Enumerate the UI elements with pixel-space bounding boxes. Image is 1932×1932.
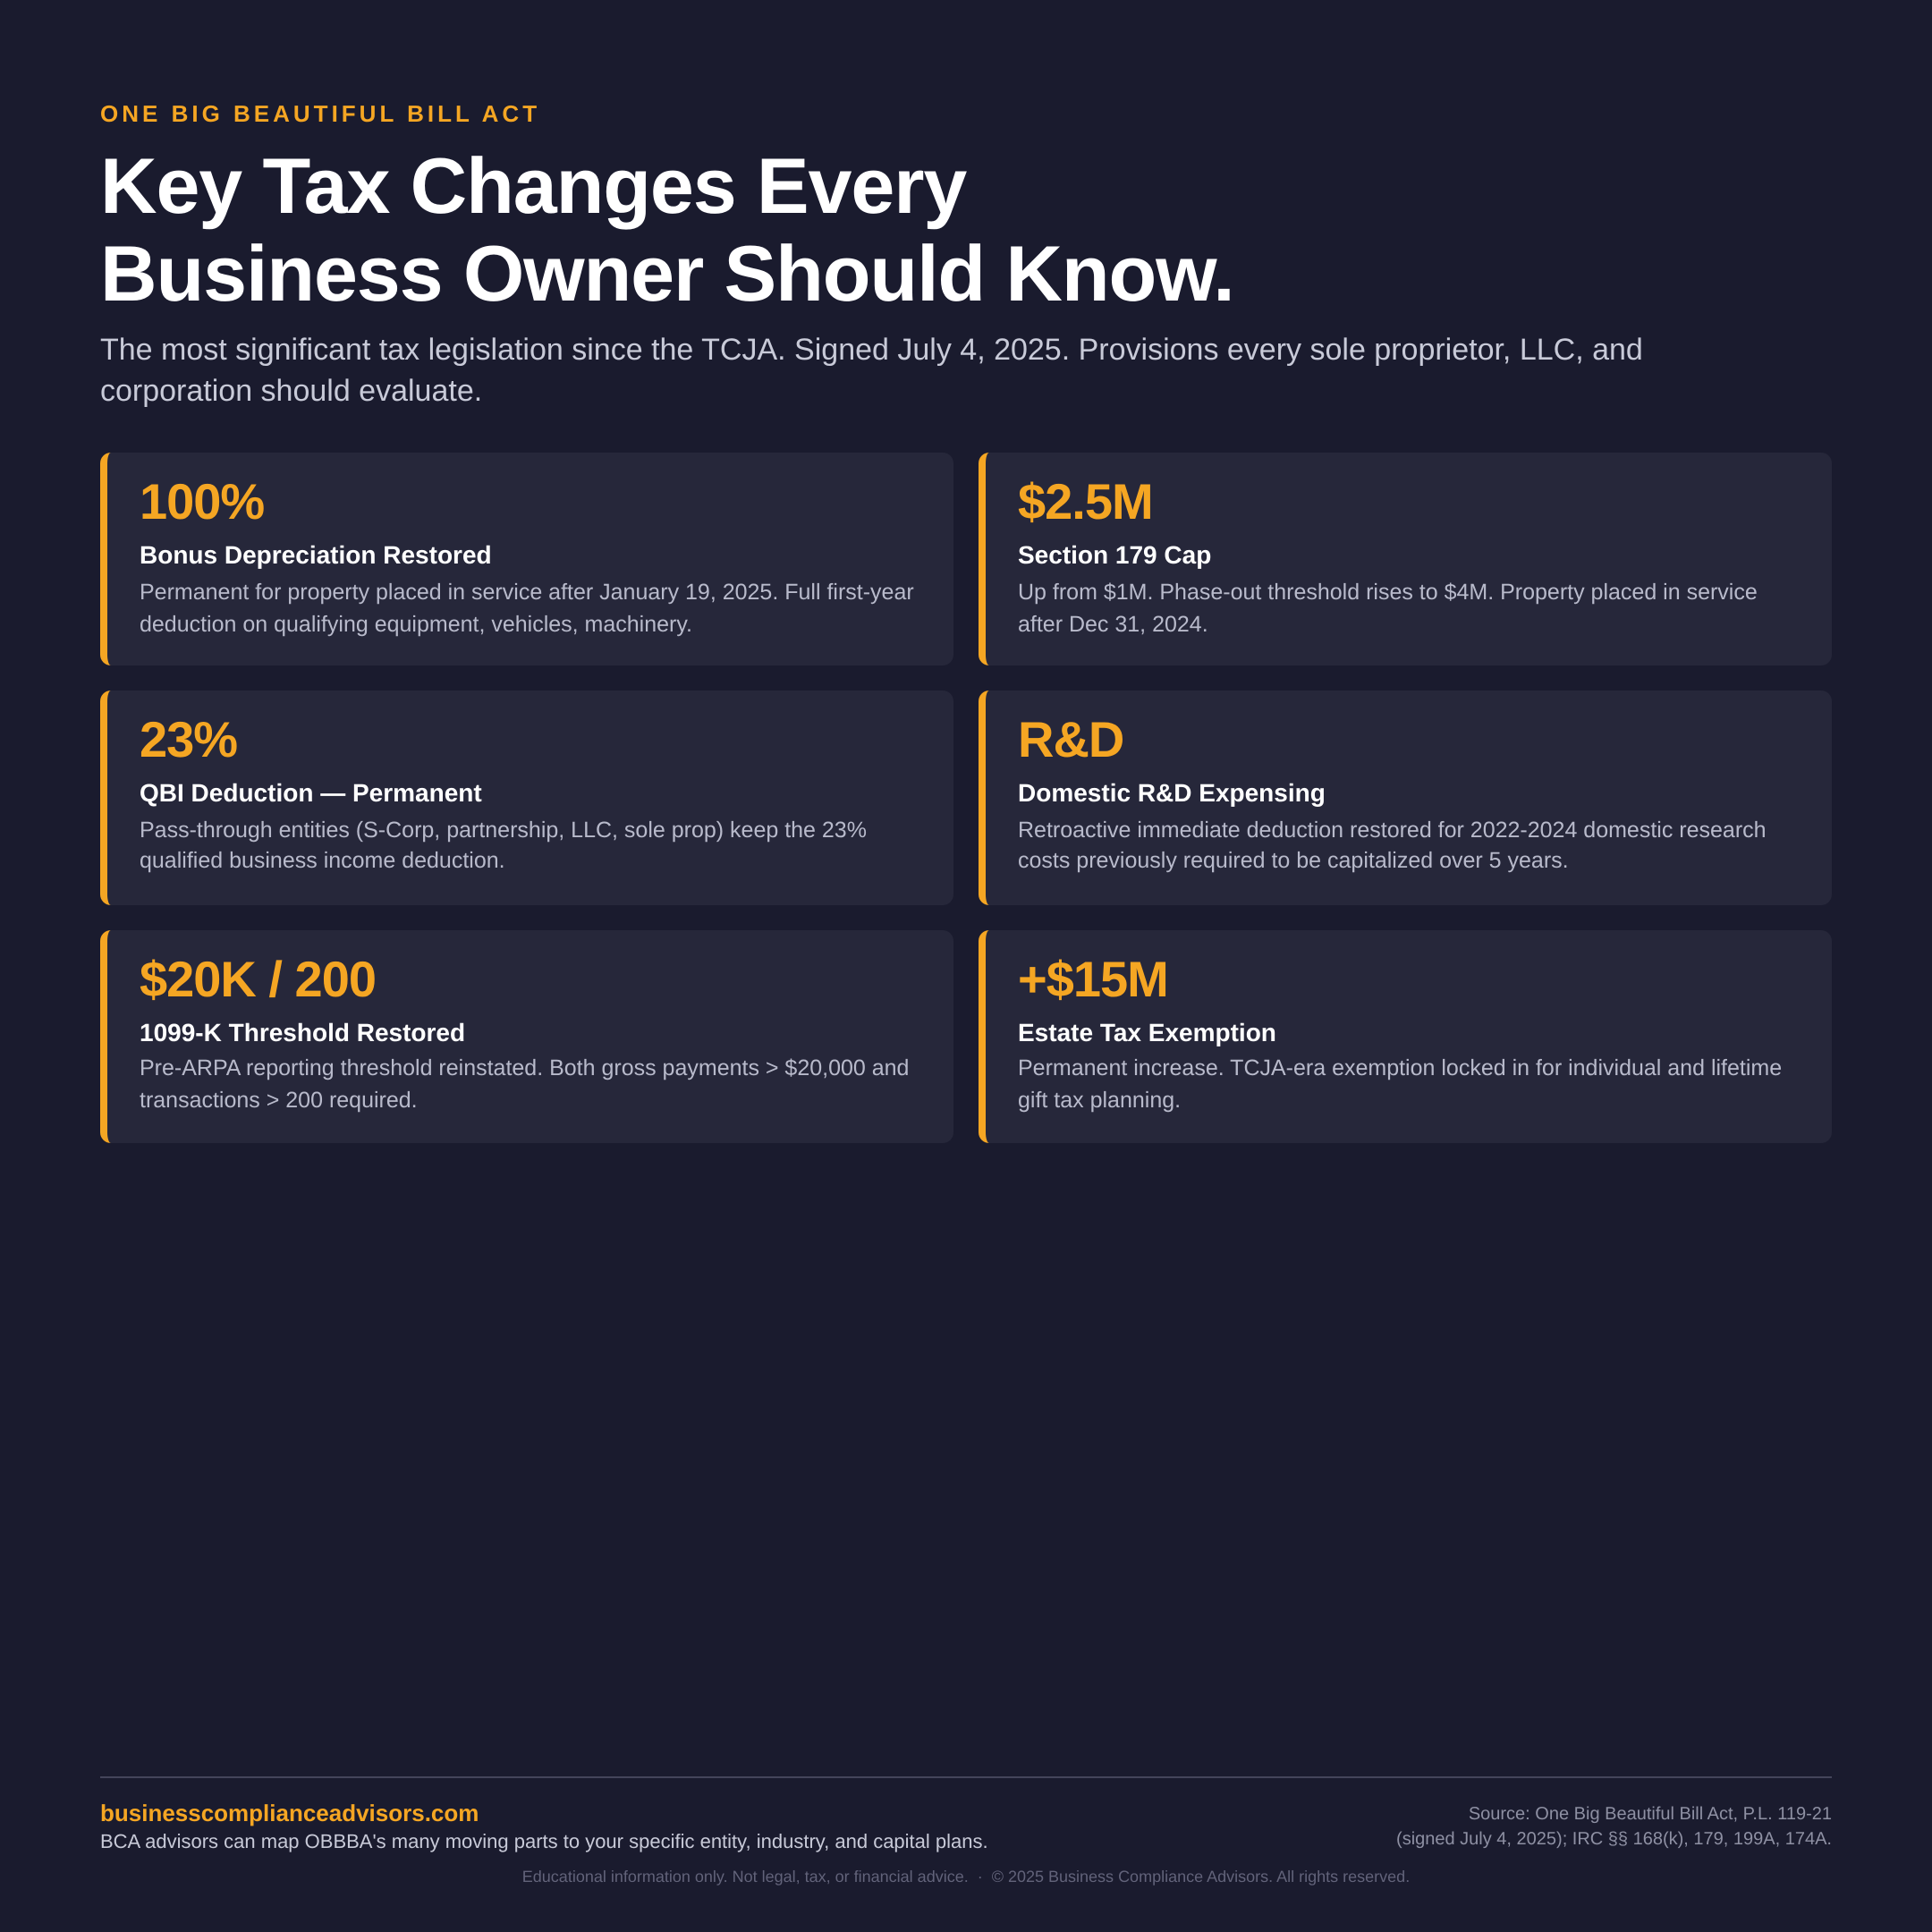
card heading: estate tax: Estate Tax Exemption [1018, 1017, 1276, 1046]
card description: bonus depreciation: deduction on qualifying equipment, vehicles, machinery. [140, 612, 692, 637]
title [100, 143, 1234, 318]
stat: R&D: R&D [1018, 712, 1123, 767]
panel: QBI deduction card [100, 691, 953, 905]
panel: estate tax card [979, 930, 1832, 1143]
subtitle text: The most significant tax legislation since the TCJA. Signed July 4, 2025. Provisions every sole proprietor, LLC, and [100, 333, 1643, 367]
title: Key Tax Changes Every [100, 143, 966, 231]
card description: section 179: after Dec 31, 2024. [1018, 612, 1208, 637]
footer tagline: BCA advisors can map OBBBA's many moving parts to your specific entity, industry, and capital plans. [100, 1831, 988, 1852]
panel: bonus depreciation card [100, 453, 953, 665]
subtitle text: corporation should evaluate. [100, 374, 482, 408]
card description: estate tax [1018, 1055, 1782, 1113]
panel: R&D expensing card [979, 691, 1832, 905]
card description: 1099-K threshold: Pre-ARPA reporting threshold reinstated. Both gross payments > $20,000 and [140, 1055, 909, 1080]
card description: estate tax: gift tax planning. [1018, 1087, 1181, 1112]
title: Business Owner Should Know. [100, 231, 1234, 318]
footer source note [1396, 1804, 1832, 1849]
card description: 1099-K threshold [140, 1055, 909, 1113]
card heading: QBI deduction: QBI Deduction — Permanent [140, 777, 482, 806]
stat: +$15M: +$15M [1018, 952, 1168, 1007]
card description: bonus depreciation [140, 580, 914, 637]
card description: bonus depreciation: Permanent for property placed in service after January 19, 2025. Full first-year [140, 580, 914, 605]
card description: R&D expensing: Retroactive immediate deduction restored for 2022-2024 domestic research [1018, 818, 1767, 843]
panel: 1099-K threshold card [100, 930, 953, 1143]
footer source note: Source: One Big Beautiful Bill Act, P.L. 119-21 [1469, 1804, 1832, 1824]
card heading: 1099-K threshold: 1099-K Threshold Restored [140, 1017, 465, 1046]
footer disclaimer: Educational information only. Not legal, tax, or financial advice. · © 2025 Business Compliance Advisors. All rights reserved. [522, 1868, 1410, 1885]
card description: estate tax: Permanent increase. TCJA-era exemption locked in for individual and lifetime [1018, 1055, 1782, 1080]
footer source note: (signed July 4, 2025); IRC §§ 168(k), 179, 199A, 174A. [1396, 1829, 1832, 1849]
card heading: bonus depreciation: Bonus Depreciation Restored [140, 539, 492, 568]
stat: 100%: 100% [140, 474, 264, 530]
stat: 23%: 23% [140, 712, 237, 767]
card heading: R&D expensing: Domestic R&D Expensing [1018, 777, 1326, 806]
subtitle text [100, 333, 1643, 408]
stat: $20K / 200: $20K / 200 [140, 952, 376, 1007]
card description: 1099-K threshold: transactions > 200 required. [140, 1087, 418, 1112]
card heading: section 179: Section 179 Cap [1018, 539, 1211, 568]
card description: R&D expensing: costs previously required to be capitalized over 5 years. [1018, 848, 1569, 873]
footer website link: businesscomplianceadvisors.com [100, 1799, 479, 1826]
panel: section 179 card [979, 453, 1832, 665]
card description: QBI deduction: Pass-through entities (S-Corp, partnership, LLC, sole prop) keep the 23% [140, 818, 867, 843]
card description: R&D expensing [1018, 818, 1767, 873]
card description: QBI deduction [140, 818, 867, 873]
card description: section 179: Up from $1M. Phase-out threshold rises to $4M. Property placed in service [1018, 580, 1758, 605]
card description: section 179 [1018, 580, 1758, 637]
eyebrow label: ONE BIG BEAUTIFUL BILL ACT [100, 99, 540, 126]
stat: $2.5M: $2.5M [1018, 474, 1153, 530]
card description: QBI deduction: qualified business income deduction. [140, 848, 505, 873]
